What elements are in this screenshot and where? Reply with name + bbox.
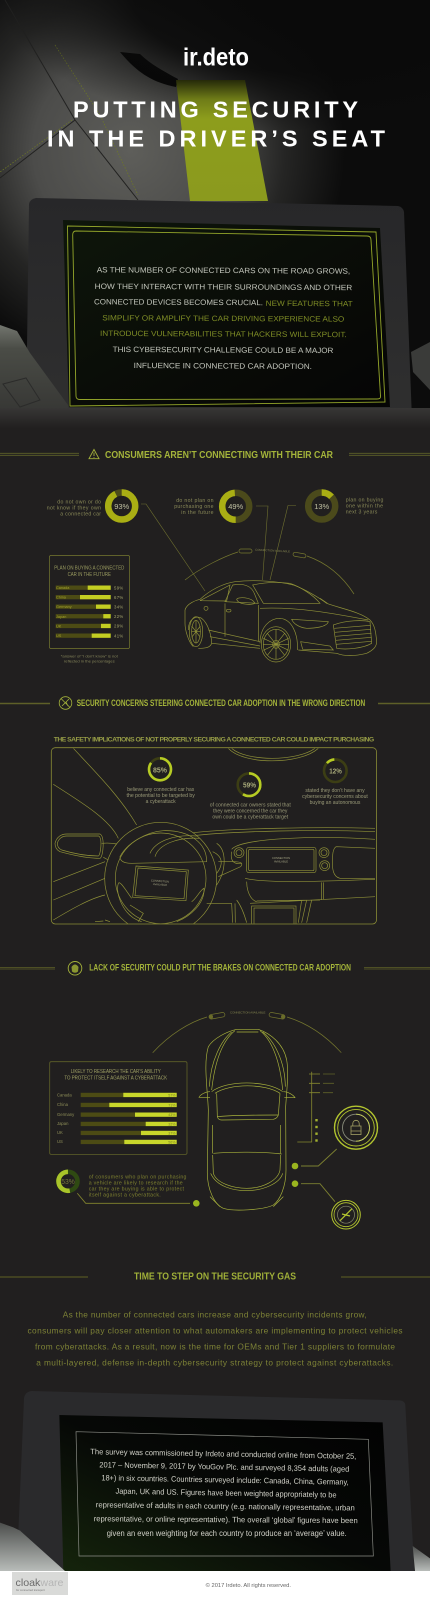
monitor intro text: NEW FEATURES THAT (266, 299, 353, 308)
section 2 heading (0, 697, 430, 709)
monitor intro text: INFLUENCE IN CONNECTED CAR ADOPTION. (134, 361, 312, 371)
survey text: representative, or online representative). The overall ‘global’ figures have been (94, 1514, 358, 1525)
bottom monitor (17, 1391, 414, 1571)
stat: 59%: own could be a cyberattack target (212, 815, 289, 821)
console left and right (0, 325, 430, 428)
survey text (90, 1447, 358, 1538)
bar chart: plan on buying: CAR IN THE FUTURE (68, 572, 111, 578)
donut: 93% (108, 492, 135, 520)
bar chart: likely to research: 37% (168, 1131, 176, 1135)
monitor intro text (94, 265, 353, 371)
stat: 85% (127, 758, 195, 805)
scale ticks (297, 1072, 335, 1142)
donut label: 49%: purchasing one (174, 504, 214, 510)
donut label: 93%: a connected car (60, 512, 101, 518)
icon: lock circle (334, 1106, 378, 1149)
stat: 59%: they were concerned the car they (213, 809, 288, 815)
bar chart: likely to research: LIKELY TO RESEARCH THE CAR’S ABILITY (71, 1069, 161, 1075)
subheading: THE SAFETY IMPLICATIONS OF NOT PROPERLY SECURING A CONNECTED CAR COULD IMPACT PURCHASING (54, 737, 374, 744)
bar chart: likely to research: TO PROTECT ITSELF AGAINST A CYBERATTACK (64, 1075, 167, 1081)
bar chart: likely to research: 32% (168, 1122, 176, 1126)
bar chart: likely to research: Canada (57, 1092, 72, 1098)
donut label: 13% (346, 498, 384, 516)
text: 53% description: a vehicle are likely to research if the (89, 1181, 183, 1187)
bar chart: likely to research: 57% (168, 1093, 176, 1097)
text: 53% description: of consumers who plan on purchasing (89, 1175, 187, 1181)
donut: 13% (308, 492, 335, 520)
bar chart: likely to research: 56% (168, 1140, 176, 1144)
icon: no steering (59, 697, 72, 709)
closing paragraph: As the number of connected cars increase and cybersecurity incidents grow, (63, 1310, 367, 1320)
title: IN THE DRIVER’S SEAT (47, 126, 386, 152)
stat: 12% (302, 755, 368, 806)
monitor intro text: INTRODUCE VULNERABILITIES THAT HACKERS WILL EXPLOIT. (100, 329, 347, 339)
stat: 12%: 12% (329, 766, 342, 776)
top monitor (26, 198, 412, 420)
bar chart: plan on buying (50, 556, 130, 648)
footnote: *answer of “I don’t know” is not (61, 654, 119, 658)
copyright: © 2017 Irdeto. All rights reserved. (206, 1582, 291, 1589)
monitor intro text: AS THE NUMBER OF CONNECTED CARS ON THE ROAD GROWS, (97, 265, 350, 276)
stat: 59%: 59% (243, 781, 256, 790)
donut label: 13%: plan on buying (346, 498, 384, 504)
seat belt (176, 80, 268, 201)
connector lines (141, 504, 296, 591)
cloakware logo (12, 1572, 68, 1595)
bar chart: likely to research: US (57, 1139, 63, 1144)
connection arc: side car: CONNECTION AVAILABLE (255, 548, 290, 553)
bar chart: plan on buying: 59% (114, 585, 124, 590)
donut label: 93% (47, 500, 101, 518)
survey text: 2017 – November 9, 2017 by YouGov Plc. and surveyed 8,354 adults (aged (99, 1460, 349, 1474)
survey text: given an even weighting for each country to produce an ‘average’ value. (107, 1529, 347, 1538)
bar chart: plan on buying: China (56, 596, 67, 600)
panel: dashboard illustration: AVAILABLE (153, 882, 167, 887)
donut: 53% (57, 1170, 79, 1192)
title: PUTTING SECURITY (73, 96, 358, 122)
donut label: 49%: in the future (181, 510, 214, 516)
panel: dashboard illustration: AVAILABLE (274, 860, 288, 864)
panel: dashboard illustration (51, 748, 377, 934)
connection arc: top car: CONNECTION AVAILABLE (230, 1012, 266, 1014)
bar chart: likely to research: UK (57, 1130, 63, 1135)
icon: brake hand (68, 962, 82, 975)
monitor intro text: HOW THEY INTERACT WITH THEIR SURROUNDINGS AND OTHER (95, 282, 353, 292)
hero background: car seat (0, 0, 430, 420)
cloakware logo: cloakware (16, 1577, 64, 1589)
donut: 53%: 53% (61, 1179, 75, 1186)
stat: 59%: of connected car owners stated that (210, 803, 291, 809)
closing paragraph: from cyberattacks. As a result, now is the time for OEMs and Tier 1 suppliers to formulate (35, 1341, 395, 1351)
donut label: 49% (174, 498, 214, 516)
stat: 85%: 85% (153, 765, 167, 774)
donut: 49% (222, 493, 249, 520)
stat: 59% (210, 773, 291, 821)
monitor intro text: THIS CYBERSECURITY CHALLENGE COULD BE A MAJOR (113, 345, 334, 355)
logo: ir.deto (183, 44, 249, 72)
monitor intro text: SIMPLIFY OR AMPLIFY THE CAR DRIVING EXPERIENCE ALSO (102, 313, 344, 324)
donut label: 13%: next 3 years (346, 510, 378, 516)
icon: warning triangle (89, 450, 99, 459)
bar chart: plan on buying: UK (56, 624, 62, 628)
stat: 12%: stated they don’t have any (305, 788, 365, 794)
survey text: Japan, UK and US. Figures have been weighted appropriately to be (115, 1487, 337, 1500)
illustration: side view car (185, 581, 377, 662)
survey text: 18+) in six countries. Countries surveyed include: Canada, China, Germany, (101, 1473, 349, 1487)
bar chart: plan on buying: 29% (114, 624, 124, 629)
donut label: 93%: not know if they own (47, 506, 101, 512)
footnote: reflected in the percentages (64, 659, 115, 664)
panel: dashboard illustration: CONNECTION (151, 878, 169, 884)
bar chart: plan on buying: 41% (114, 633, 124, 638)
stat: 85%: a cyberattack (146, 799, 176, 805)
section 1 heading: CONSUMERS AREN’T CONNECTING WITH THEIR CAR (105, 450, 333, 461)
donut: 93%: 93% (114, 502, 130, 511)
bar chart: plan on buying: PLAN ON BUYING A CONNECTED (54, 566, 124, 572)
title (47, 96, 386, 152)
donut label: 49%: do not plan on (176, 498, 214, 504)
stat: 85%: believe any connected car has (127, 787, 195, 793)
closing paragraph: consumers will pay closer attention to what automakers are implementing to protect vehicles (28, 1326, 402, 1336)
panel: dashboard illustration: CONNECTION (272, 856, 290, 860)
dark content background (0, 428, 430, 1571)
bar chart: plan on buying: 34% (114, 604, 124, 609)
section 3 heading (0, 962, 430, 975)
bar chart: plan on buying: 22% (114, 614, 124, 619)
bar chart: plan on buying: US (56, 634, 62, 638)
donut label: 93%: do not own or do (57, 500, 101, 506)
footnote (61, 654, 119, 664)
bar chart: likely to research: 71% (168, 1103, 176, 1107)
donut: 13%: 13% (314, 502, 330, 511)
survey text: representative of adults in each country (e.g. nationally representative, urban (96, 1500, 355, 1512)
bar chart: likely to research: Japan (57, 1121, 69, 1126)
closing paragraph (28, 1310, 402, 1367)
stat: 12%: cybersecurity concerns about (302, 794, 368, 800)
bar chart: likely to research (50, 1062, 187, 1154)
text: 53% description: car they are buying is able to protect (89, 1187, 185, 1193)
footer (0, 1571, 430, 1600)
donut label: 13%: one within the (346, 504, 383, 510)
survey text: The survey was commissioned by Irdeto and conducted online from October 25, (90, 1447, 356, 1461)
closing paragraph: a multi-layered, defense in-depth cybersecurity strategy to protect against cyberattacks. (36, 1357, 393, 1367)
cloakware logo: for connected transport (16, 1588, 45, 1592)
bar chart: likely to research: China (57, 1102, 69, 1107)
donut: 49%: 49% (228, 502, 244, 511)
connection arc: top car (153, 1012, 341, 1053)
text: 53% description: itself against a cyberattack. (89, 1193, 161, 1199)
callout connectors (292, 1149, 337, 1202)
bar chart: plan on buying: Japan (56, 615, 66, 619)
monitor intro text: CONNECTED DEVICES BECOMES CRUCIAL. (94, 297, 263, 307)
bar chart: likely to research: 43% (168, 1113, 176, 1117)
bar chart: plan on buying: Germany (56, 605, 72, 609)
illustration: top view car (199, 1029, 295, 1210)
section 4 heading: TIME TO STEP ON THE SECURITY GAS (134, 1271, 296, 1282)
bottom console (0, 1523, 430, 1571)
stat: 12%: buying an autonomous (310, 800, 361, 806)
bar chart: plan on buying: Canada (56, 586, 70, 590)
text: 53% description (89, 1175, 187, 1199)
bar chart: plan on buying: 67% (114, 595, 124, 600)
stat: 85%: the potential to be targeted by (127, 793, 195, 799)
bar chart: likely to research: Germany (57, 1112, 75, 1117)
connector: 53% callout (77, 1193, 200, 1207)
section 1 heading (0, 450, 430, 461)
icon: no steering circle (332, 1200, 360, 1229)
connection arc: side car (185, 548, 354, 594)
